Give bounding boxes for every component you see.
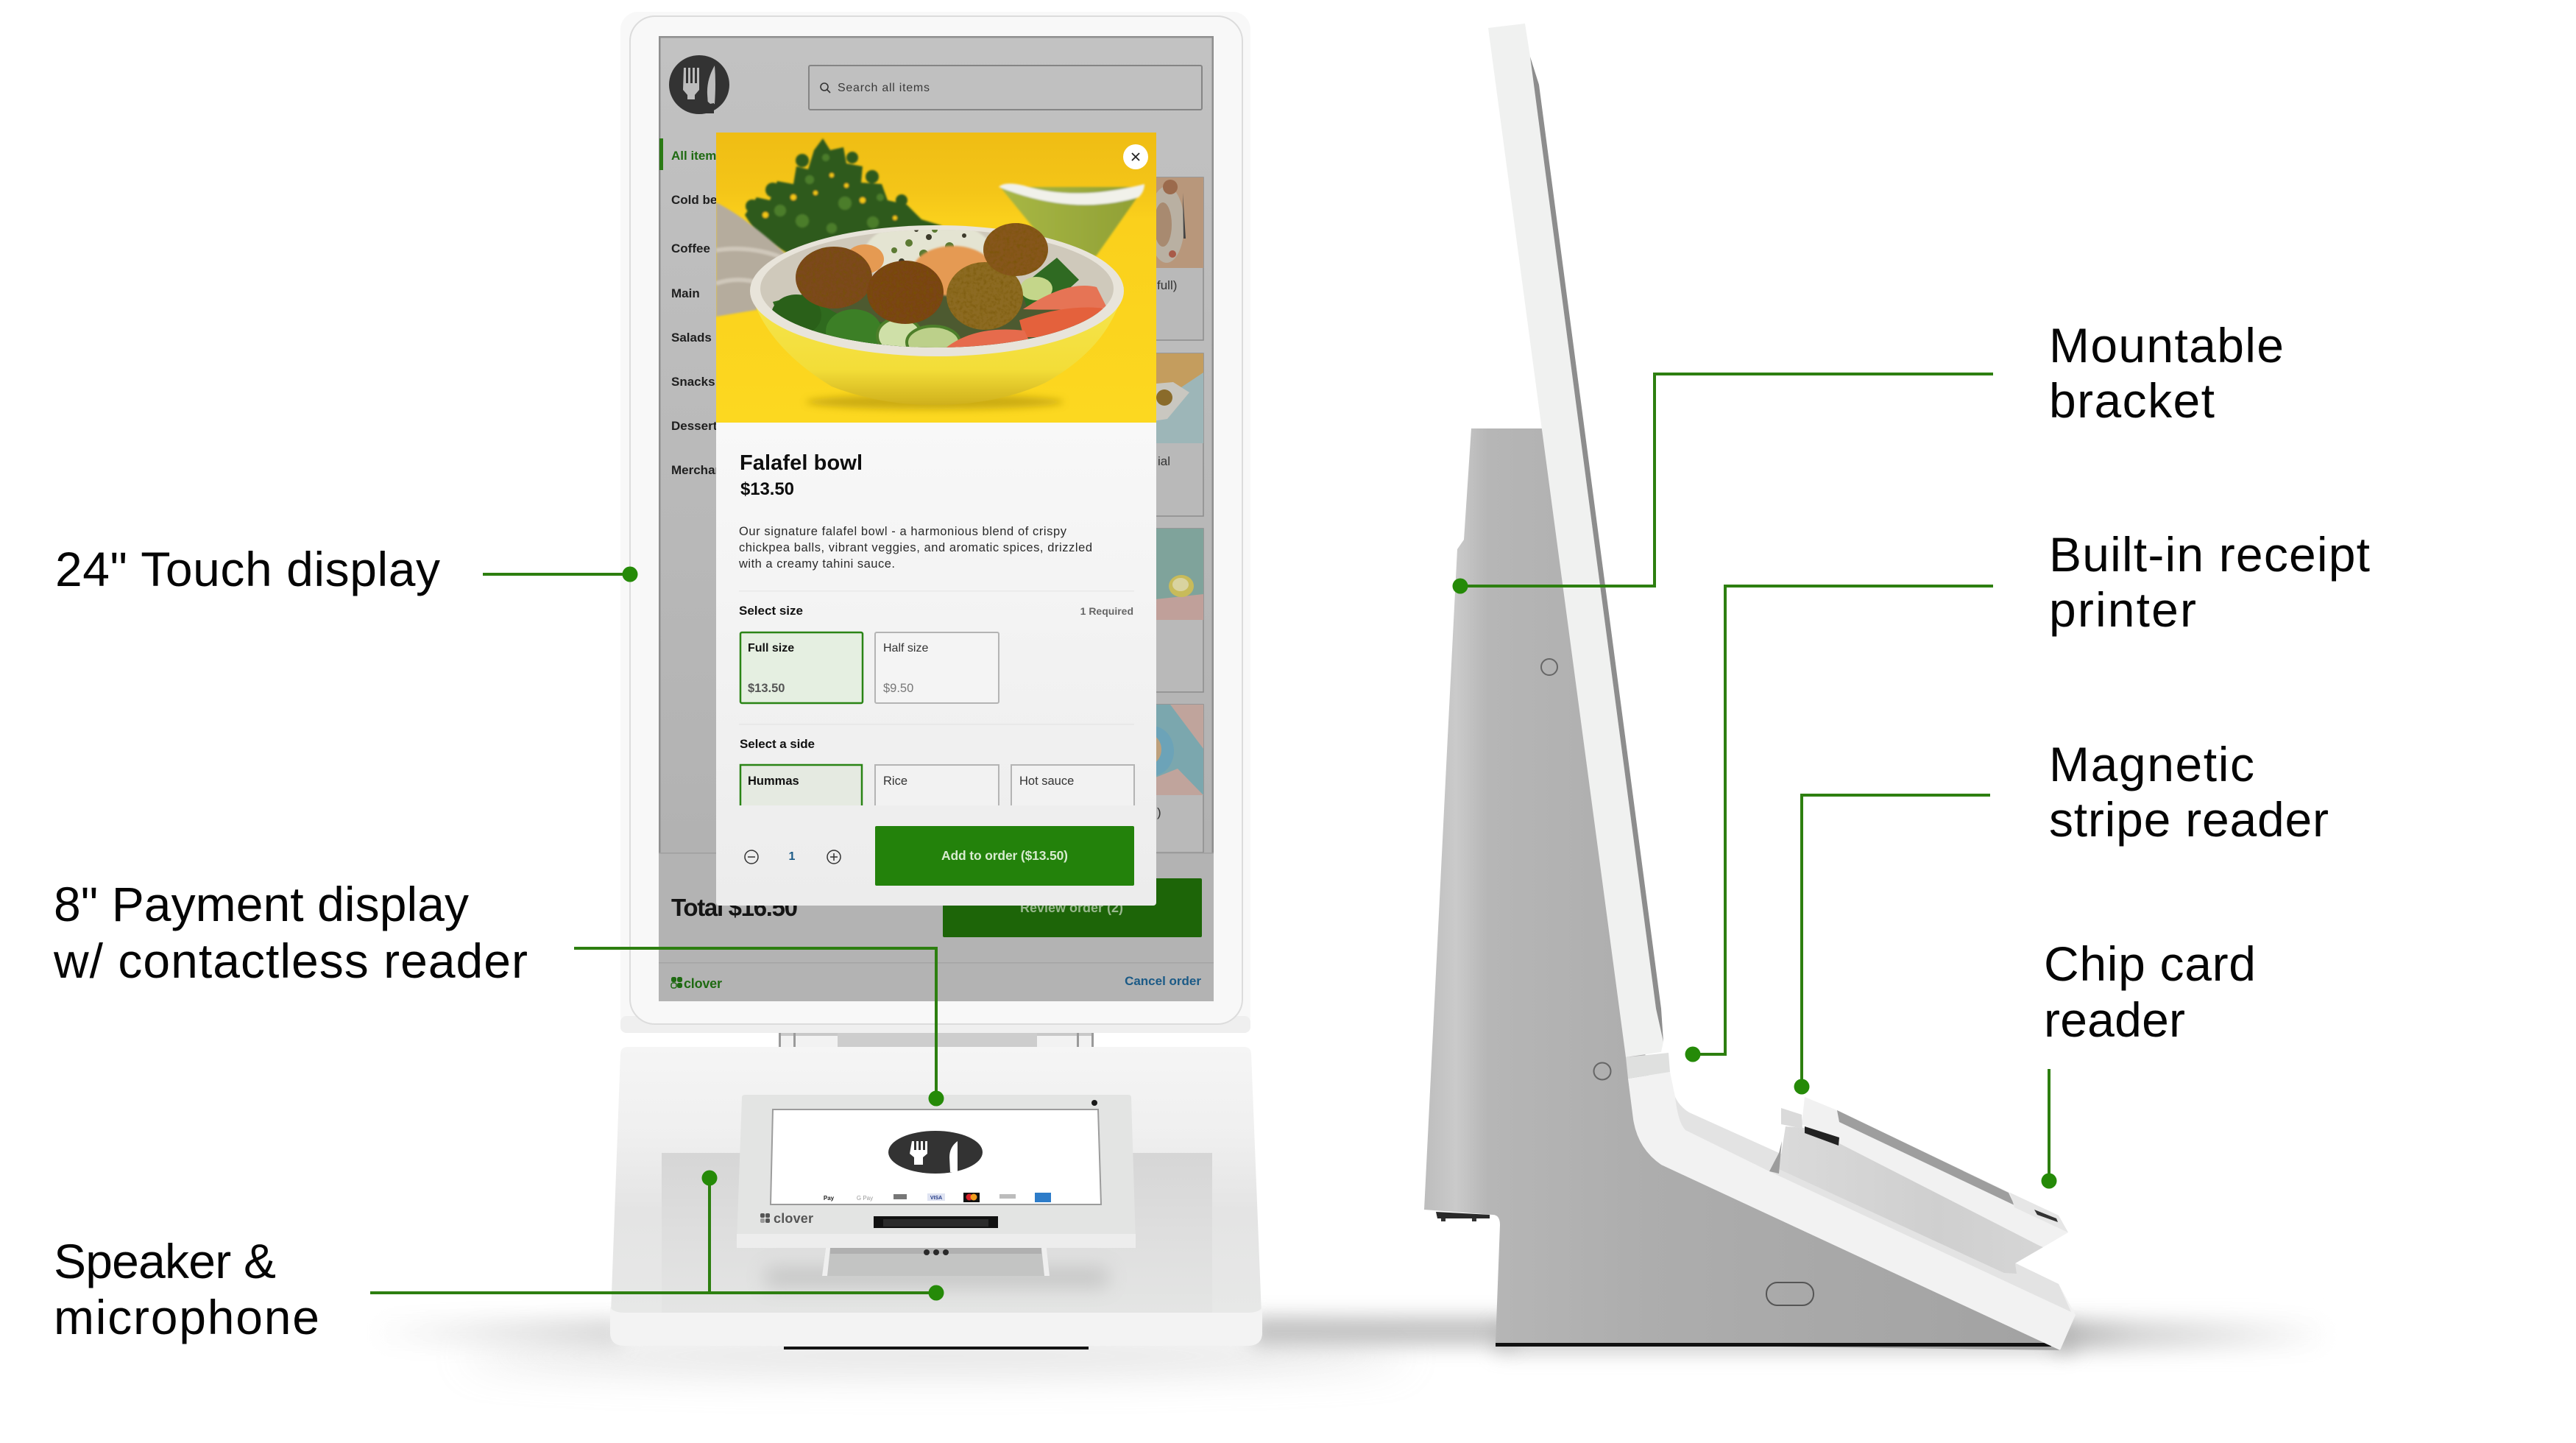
option: half size: $9.50 [883, 682, 913, 695]
label: mountable bracket: bracket [2049, 373, 2215, 428]
option: full size: $13.50 [748, 682, 785, 695]
rear foot [1436, 1212, 2051, 1347]
close button [1123, 144, 1148, 169]
label: speaker and microphone: microphone [54, 1290, 319, 1344]
category menu: Desserts [671, 419, 724, 433]
category menu [659, 138, 716, 474]
bowl [750, 225, 1124, 409]
sauce cup [999, 183, 1144, 256]
size options [739, 604, 1133, 703]
item price: $13.50 [740, 479, 794, 499]
menu item cards: full) [1157, 278, 1177, 292]
item description [738, 525, 1092, 571]
label: payment display: 8" Payment display [54, 877, 469, 931]
clover wordmark [670, 977, 722, 989]
base [610, 1047, 1262, 1349]
menu item cards: ) [1157, 805, 1161, 819]
option: hot sauce [1011, 765, 1134, 805]
option: half size [875, 632, 999, 703]
payment screen [771, 1109, 1101, 1204]
clover wordmark: clover [684, 976, 722, 991]
side options: Select a side [740, 737, 815, 751]
label: receipt printer [1685, 527, 2370, 1062]
label: chip card reader [2042, 936, 2256, 1188]
screw [1541, 659, 1557, 675]
label: mountable bracket: Mountable [2049, 318, 2284, 373]
food photo: falafel bowl [716, 133, 1156, 423]
item title: Falafel bowl [740, 451, 863, 475]
chip slot [1805, 1126, 1839, 1146]
label: mountable bracket [1453, 318, 2284, 593]
icon: restaurant logo [669, 55, 729, 114]
quantity stepper: 1 [789, 850, 796, 863]
card reader slot [874, 1216, 998, 1228]
total: Total $16.50 [671, 894, 798, 921]
category menu: Cold beverages [671, 193, 765, 207]
cancel order: Cancel order [1125, 974, 1201, 988]
review order button [943, 878, 1202, 937]
label: magnetic stripe reader: stripe reader [2049, 792, 2329, 847]
add to order button [875, 826, 1134, 886]
item description: chickpea balls, vibrant veggies, and aromatic spices, drizzled [739, 541, 1092, 554]
payment logos: G Pay [857, 1195, 873, 1202]
payment pedestal side [1779, 1126, 2043, 1274]
falafel [796, 223, 1048, 330]
label: payment display [53, 877, 944, 1106]
payment logos: VISA [930, 1196, 942, 1201]
label: payment display: w/ contactless reader [53, 934, 528, 988]
label: receipt printer: printer [2049, 582, 2196, 637]
menu item cards: ial [1158, 454, 1170, 468]
port [1766, 1283, 1814, 1305]
label: chip card reader: Chip card [2044, 936, 2256, 991]
vegetables [771, 258, 1109, 364]
label: 24 inch touch display: 24" Touch display [55, 542, 440, 596]
search bar [809, 66, 1202, 110]
floor shadow: front unit [368, 1316, 1516, 1372]
rear stand body [1424, 428, 2061, 1350]
menu item cards [1156, 177, 1204, 853]
category menu: Main [671, 286, 700, 300]
side view kiosk [1424, 24, 2076, 1350]
camera [1091, 1100, 1097, 1106]
touch display frame [620, 12, 1250, 1033]
clover wordmark small: clover [774, 1211, 813, 1226]
category menu: All items [671, 149, 723, 163]
search bar: Search all items [838, 82, 930, 94]
side options [740, 737, 1134, 805]
option: hot sauce: Hot sauce [1019, 775, 1074, 788]
size options: Select size [739, 604, 803, 618]
payment logos [824, 1193, 1051, 1202]
front view kiosk [610, 12, 1262, 1349]
payment stand [822, 1248, 1050, 1276]
option: rice [875, 765, 999, 805]
item description: with a creamy tahini sauce. [738, 557, 895, 571]
stand neck [779, 1031, 1094, 1048]
label: speaker and microphone [54, 1171, 944, 1344]
item modal [716, 133, 1156, 906]
option: half size: Half size [883, 642, 928, 655]
option: full size: Full size [748, 642, 794, 655]
label: chip card reader: reader [2044, 992, 2185, 1047]
option: full size [740, 632, 863, 703]
base side [1626, 1053, 2076, 1350]
label: speaker and microphone: Speaker & [54, 1234, 276, 1288]
option: hummas: Hummas [748, 775, 799, 788]
hummus and sauce [846, 220, 994, 296]
label: receipt printer: Built-in receipt [2049, 527, 2370, 582]
option: rice: Rice [883, 775, 907, 788]
category menu: Snacks [671, 375, 715, 389]
payment logos: Pay [824, 1195, 835, 1202]
add to order button: Add to order ($13.50) [941, 848, 1068, 863]
hinge screw [1594, 1063, 1610, 1079]
quantity stepper [745, 850, 841, 864]
parsley [745, 138, 966, 258]
floor shadow: side unit [1494, 1319, 2333, 1353]
napkin [716, 202, 808, 317]
display panel side [1488, 24, 1663, 1057]
label: magnetic stripe reader: Magnetic [2049, 737, 2254, 791]
kiosk screen [659, 36, 1214, 1001]
review order button: Review order (2) [1020, 900, 1123, 915]
label: 24 inch touch display [55, 542, 637, 596]
label: magnetic stripe reader [1794, 737, 2329, 1094]
payment device side [1781, 1097, 2068, 1247]
order footer [659, 853, 1214, 1001]
category menu: Coffee [671, 241, 710, 255]
icon: restaurant logo small [888, 1131, 983, 1174]
payment display [737, 1095, 1136, 1248]
bowl contents [771, 220, 1109, 364]
category menu: Merchandise [671, 463, 748, 477]
category menu: Salads [671, 331, 712, 345]
item description: Our signature falafel bowl - a harmonious blend of crispy [739, 525, 1067, 538]
option: hummas [740, 765, 862, 805]
size options: 1 Required [1080, 605, 1133, 617]
